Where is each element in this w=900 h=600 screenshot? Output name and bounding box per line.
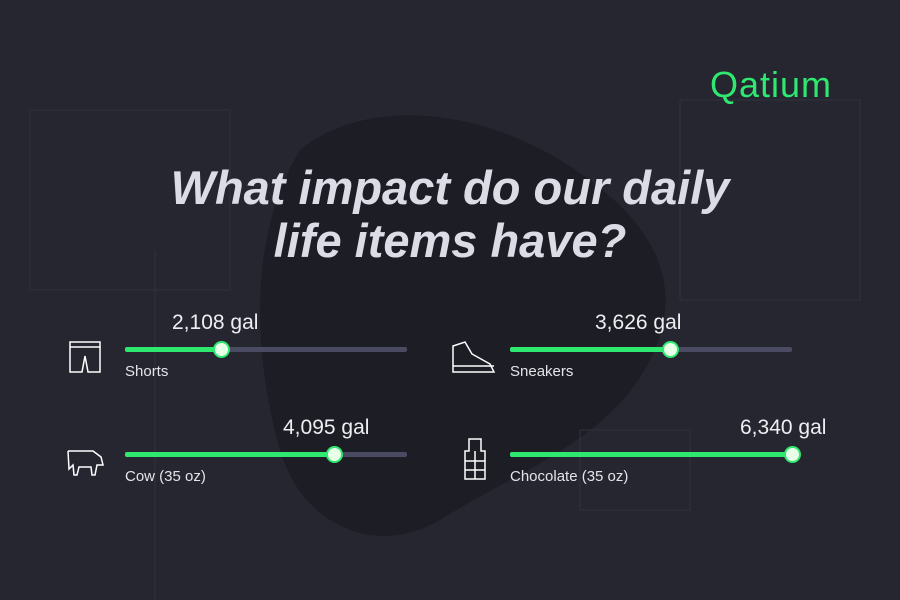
icon: cow [67,450,104,476]
title: What impact do our daily [171,161,729,214]
row: chocolate: 6,340 gal [740,416,826,439]
row: sneakers: 3,626 gal [595,311,681,334]
row: cow [67,416,407,485]
icon: shorts [69,341,101,373]
row: sneakers [452,311,792,380]
row: chocolate [464,416,826,485]
row: shorts: Shorts [125,363,168,380]
row: shorts: 2,108 gal [172,311,258,334]
row: shorts [69,311,407,380]
row: cow: Cow (35 oz) [125,468,206,485]
title [171,161,732,267]
icon: chocolate [464,438,486,480]
row: cow: 4,095 gal [283,416,369,439]
row: sneakers: Sneakers [510,363,573,380]
row: chocolate: Chocolate (35 oz) [510,468,628,485]
logo: Qatium [710,64,832,105]
icon: sneaker [452,341,496,373]
title: life items have? [274,214,626,267]
